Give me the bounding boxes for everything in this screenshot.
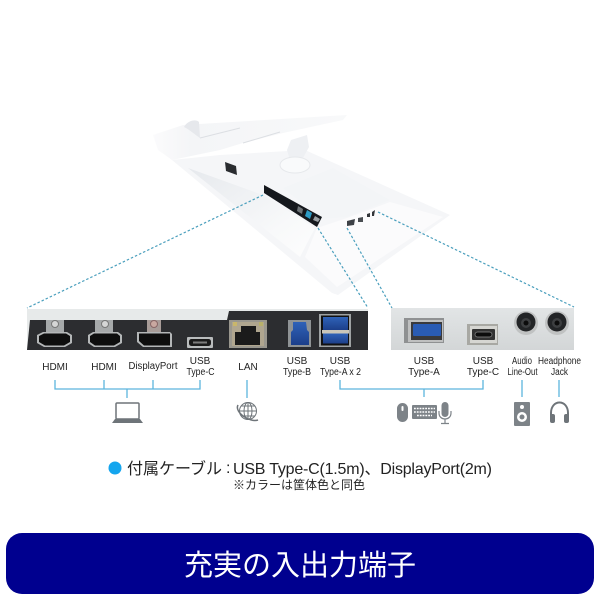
stand pivot [287, 135, 309, 160]
stand arm [153, 115, 347, 160]
port labels: Type-C [467, 367, 499, 378]
icon: laptop [112, 403, 143, 423]
cable note: : [226, 460, 230, 477]
main port slot [264, 185, 322, 227]
banner: 充実の入出力端子 [184, 549, 416, 582]
port labels: USB [473, 356, 494, 367]
colour footnote: ※カラーは筐体色と同色 [233, 477, 365, 492]
port labels: HDMI [42, 362, 68, 373]
port: USB Type-A x 2 [319, 314, 351, 347]
icon: speaker [514, 402, 530, 426]
port: USB Type-B [288, 320, 311, 347]
port labels: Headphone [538, 356, 581, 367]
icon: mouse [397, 403, 408, 422]
port labels: Type-A x 2 [320, 367, 361, 378]
port labels: Jack [551, 367, 569, 378]
icon: globe network [237, 402, 258, 421]
port labels: USB [190, 356, 211, 367]
connector brackets [55, 380, 559, 398]
LAN port on stand [225, 162, 237, 175]
icon: headphones [550, 402, 569, 423]
monitor base [172, 150, 450, 295]
port: HDMI 2 [88, 320, 122, 347]
port labels: USB [287, 356, 308, 367]
cable note: 付属ケーブル [127, 459, 222, 478]
port: side USB Type-C [467, 324, 498, 345]
icon: microphone [439, 402, 451, 424]
port: side USB Type-A [404, 318, 444, 343]
bullet [108, 462, 122, 474]
port: LAN [229, 320, 267, 348]
cable note [127, 459, 492, 478]
port labels [42, 356, 581, 378]
port: DisplayPort [137, 320, 172, 347]
port labels: USB [330, 356, 351, 367]
port: Headphone Jack [545, 311, 569, 335]
port: Audio Line-Out [514, 311, 538, 335]
port: USB Type-C [187, 337, 213, 348]
port labels: Type-A [408, 367, 440, 378]
port labels: USB [414, 356, 435, 367]
port labels: DisplayPort [128, 361, 178, 372]
panel: main rear ports [27, 309, 368, 350]
port labels: HDMI [91, 362, 117, 373]
cable note: USB Type-C(1.5m)、DisplayPort(2m) [233, 461, 492, 478]
port labels: LAN [238, 362, 258, 373]
port labels: Audio [512, 356, 532, 367]
monitor rear photo [153, 115, 450, 295]
port labels: Type-C [186, 367, 214, 378]
port: HDMI 1 [37, 320, 72, 347]
panel: side ports [391, 308, 574, 350]
icon: keyboard [412, 405, 437, 419]
side ports [347, 219, 355, 226]
port labels: Type-B [283, 367, 311, 378]
port labels: Line-Out [508, 367, 538, 378]
banner [6, 533, 594, 594]
dotted leader lines [27, 195, 574, 308]
